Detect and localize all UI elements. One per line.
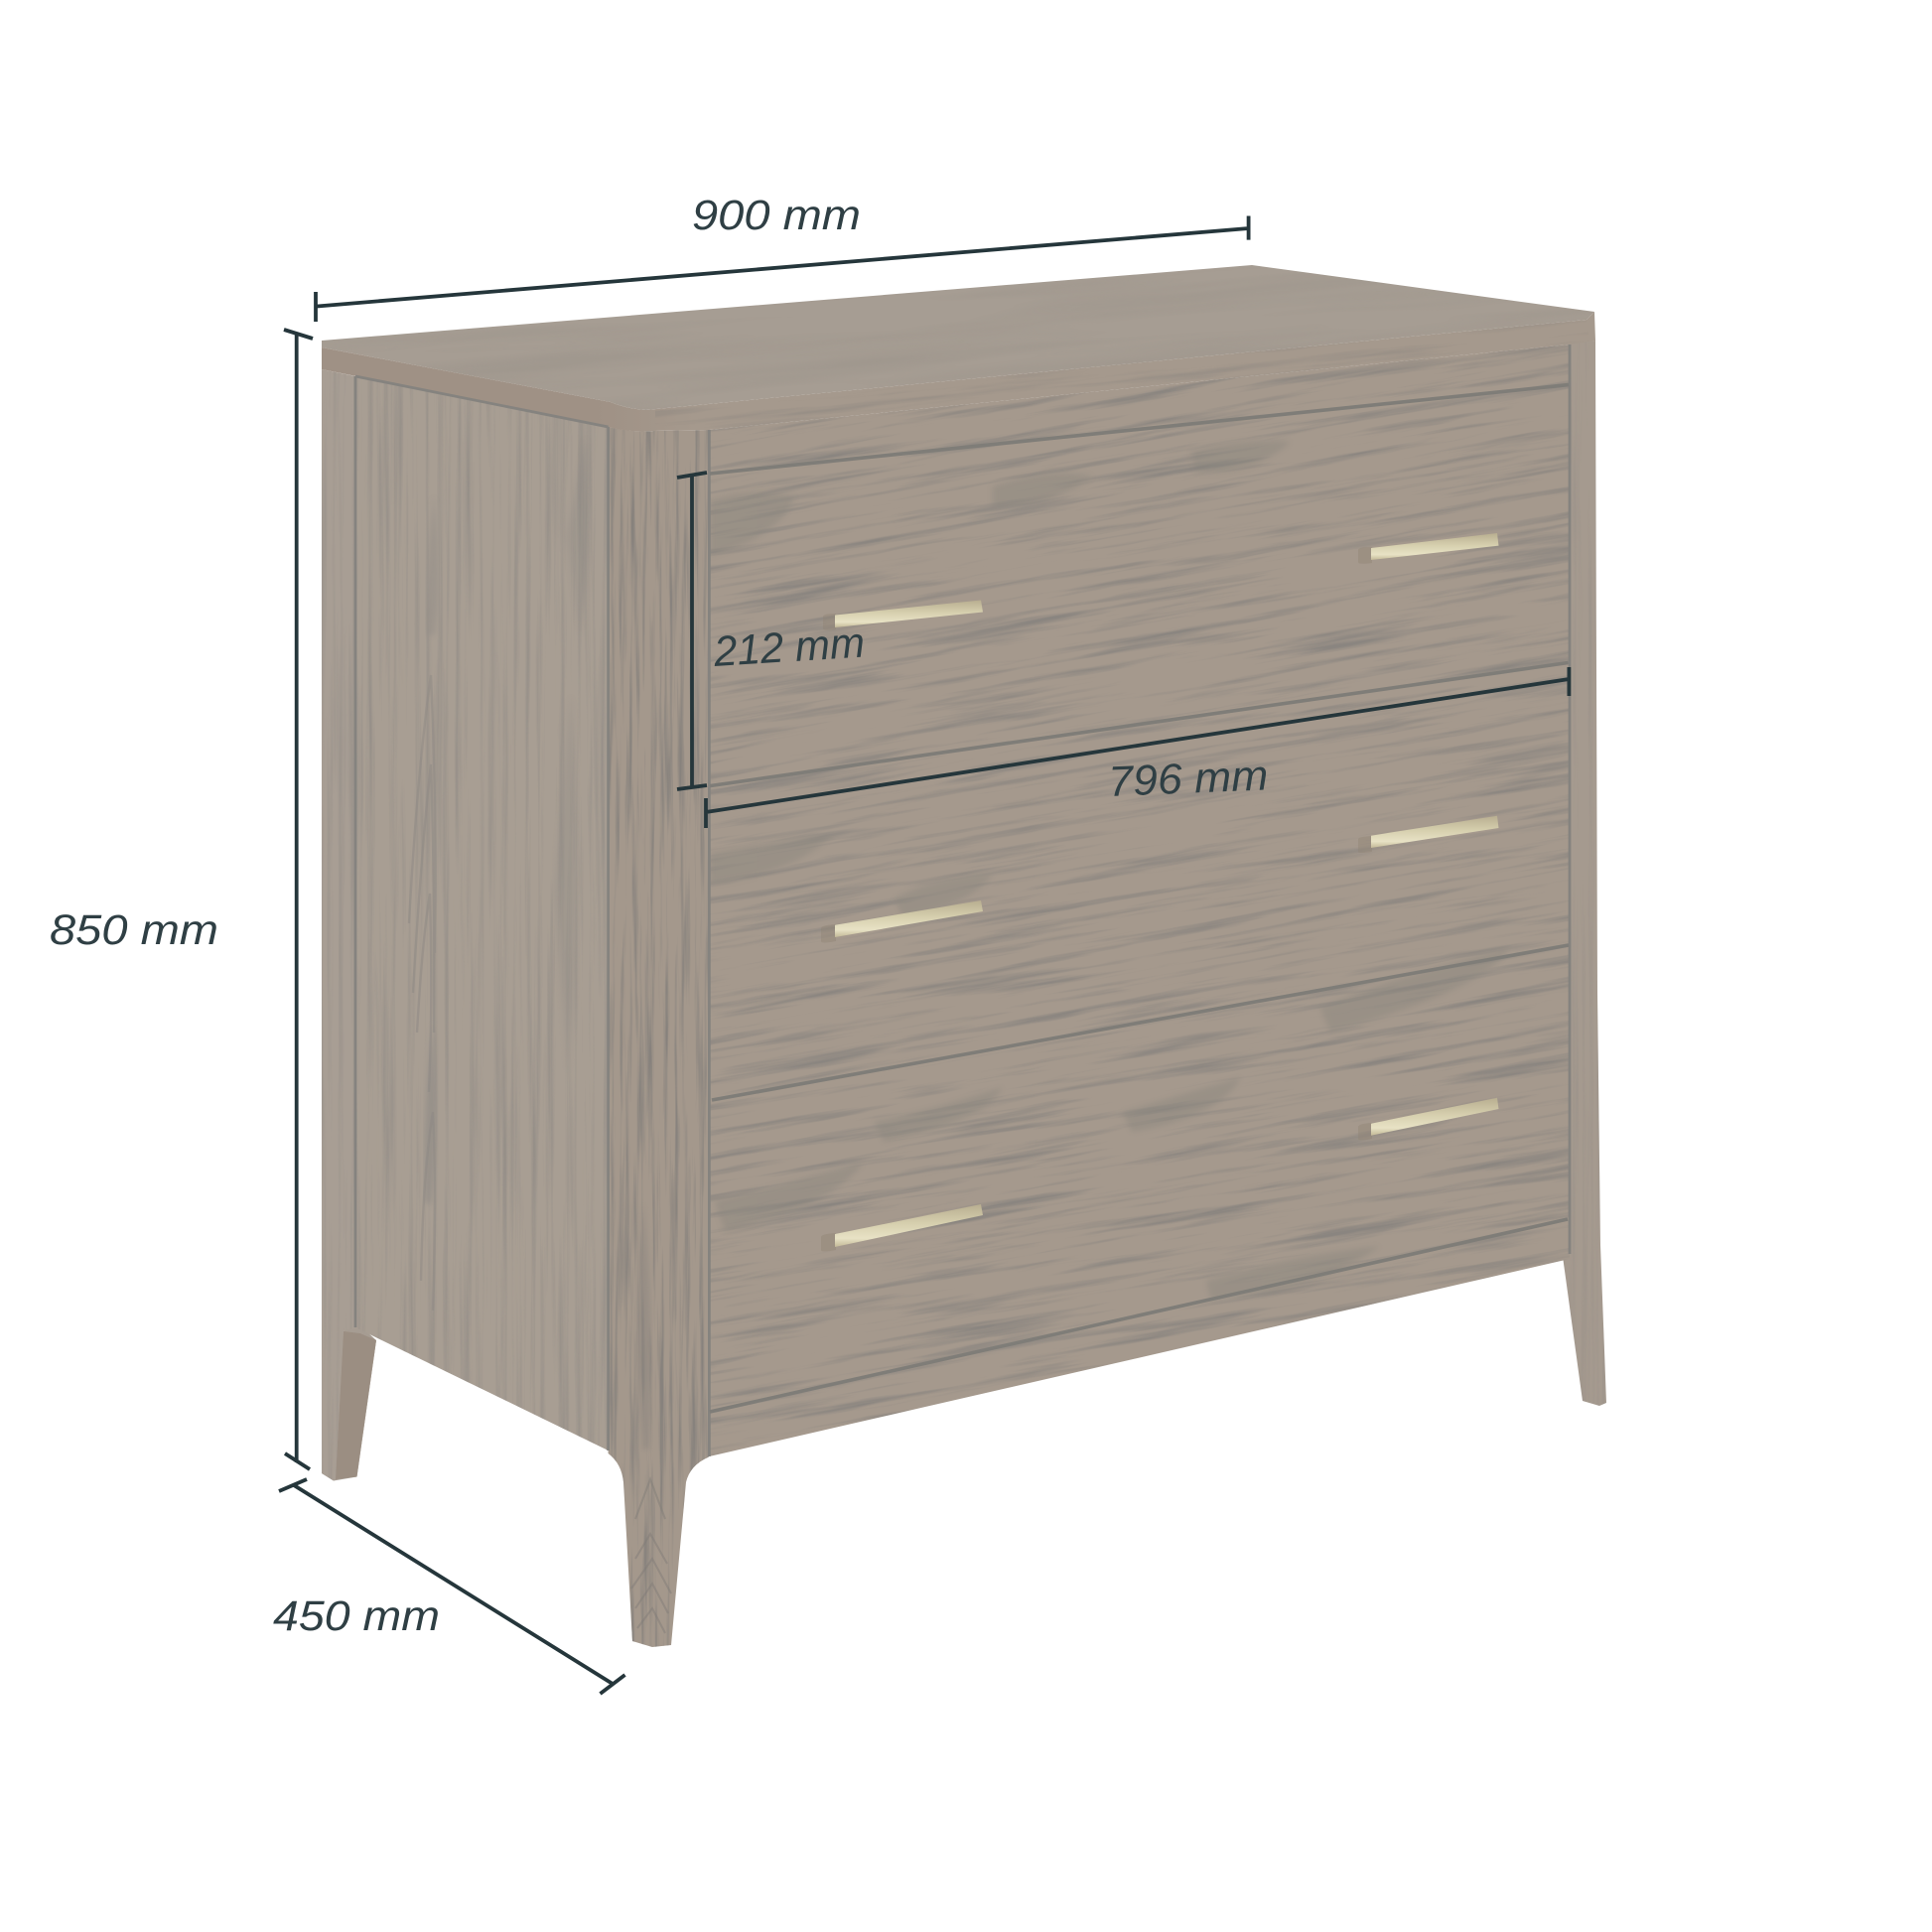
dimension: drawer width 796 mm: 796 mm — [1107, 752, 1269, 806]
front leg and corner stile — [606, 422, 713, 1653]
handle: drawer 1 right — [1358, 533, 1499, 564]
panel seams — [355, 345, 1570, 1456]
dimension: overall height 850 mm — [50, 330, 313, 1469]
top surface — [322, 265, 1594, 410]
wood figure: dark patches — [710, 441, 1509, 1301]
front panel with drawers — [711, 345, 1570, 1456]
chest of drawers — [298, 208, 1608, 1653]
vertical cathedral grain — [409, 675, 435, 1311]
handle: drawer 1 left — [823, 600, 983, 630]
handle: drawer 3 left — [821, 1204, 983, 1251]
drawer handles — [821, 533, 1499, 1251]
handle: drawer 2 right — [1358, 816, 1499, 853]
dimension: overall depth 450 mm: 450 mm — [273, 1592, 440, 1640]
dimension: drawer height 212 mm: 212 mm — [712, 620, 866, 676]
dimension: overall width 900 mm — [316, 192, 1249, 322]
left stile of side — [322, 369, 355, 1481]
top edge band — [322, 312, 1595, 431]
right stile and right leg — [1563, 341, 1606, 1406]
side panel — [352, 367, 611, 1459]
dimension: overall width 900 mm: 900 mm — [692, 192, 861, 239]
dimension: drawer width 796 mm — [706, 667, 1569, 828]
back left leg — [322, 1291, 376, 1481]
dimension: drawer height 212 mm — [677, 473, 866, 789]
dimension: overall depth 450 mm — [273, 1479, 625, 1694]
dimension: overall height 850 mm: 850 mm — [50, 906, 218, 954]
handle: drawer 3 right — [1358, 1098, 1499, 1140]
handle: drawer 2 left — [821, 900, 983, 943]
